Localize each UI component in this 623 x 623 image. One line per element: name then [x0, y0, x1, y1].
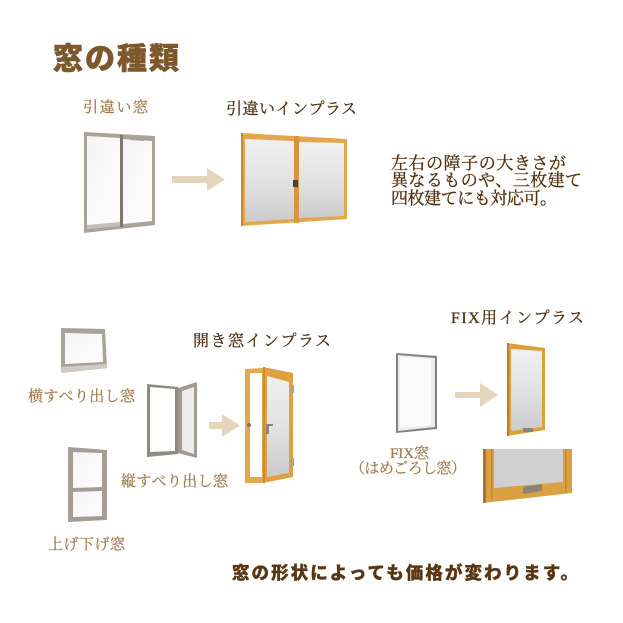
- label: double-hung: 上げ下げ窓: [48, 535, 126, 553]
- text block: note: [391, 154, 582, 208]
- arrow: fixed: [455, 383, 498, 407]
- label: fixed window: [350, 444, 466, 477]
- label: sliding window: 引違い窓: [83, 98, 149, 116]
- text block: note: 四枚建てにも対応可。: [391, 189, 557, 208]
- icon: wooden fixed window detail: [483, 449, 572, 503]
- arrow: casement: [209, 414, 240, 437]
- label: fixed window: FIX窓: [390, 444, 430, 462]
- text block: note: 異なるものや、三枚建て: [391, 171, 582, 190]
- label: horizontal slide-out: 横すべり出し窓: [28, 387, 136, 405]
- title: 窓の種類: [53, 43, 179, 76]
- label: sliding inplus: 引違いインプラス: [226, 100, 357, 118]
- closing statement: 窓の形状によっても価格が変わります。: [232, 563, 578, 583]
- icon: vertical slide-out window: [147, 382, 197, 458]
- icon: grey fixed window: [396, 353, 437, 433]
- text block: note: 左右の障子の大きさが: [391, 154, 566, 173]
- icon: grey sliding window: [84, 132, 155, 233]
- label: casement inplus: 開き窓インプラス: [193, 332, 331, 350]
- icon: wooden sliding window: [241, 133, 347, 226]
- icon: horizontal slide-out window: [61, 328, 107, 373]
- label: fixed window: （はめごろし窓）: [350, 459, 466, 477]
- icon: double-hung window: [68, 447, 107, 522]
- arrow: sliding: [172, 168, 225, 191]
- icon: wooden fixed window: [507, 343, 545, 436]
- label: vertical slide-out: 縦すべり出し窓: [121, 472, 229, 490]
- icon: wooden casement window: [245, 367, 294, 483]
- label: fixed inplus: FIX用インプラス: [451, 309, 584, 327]
